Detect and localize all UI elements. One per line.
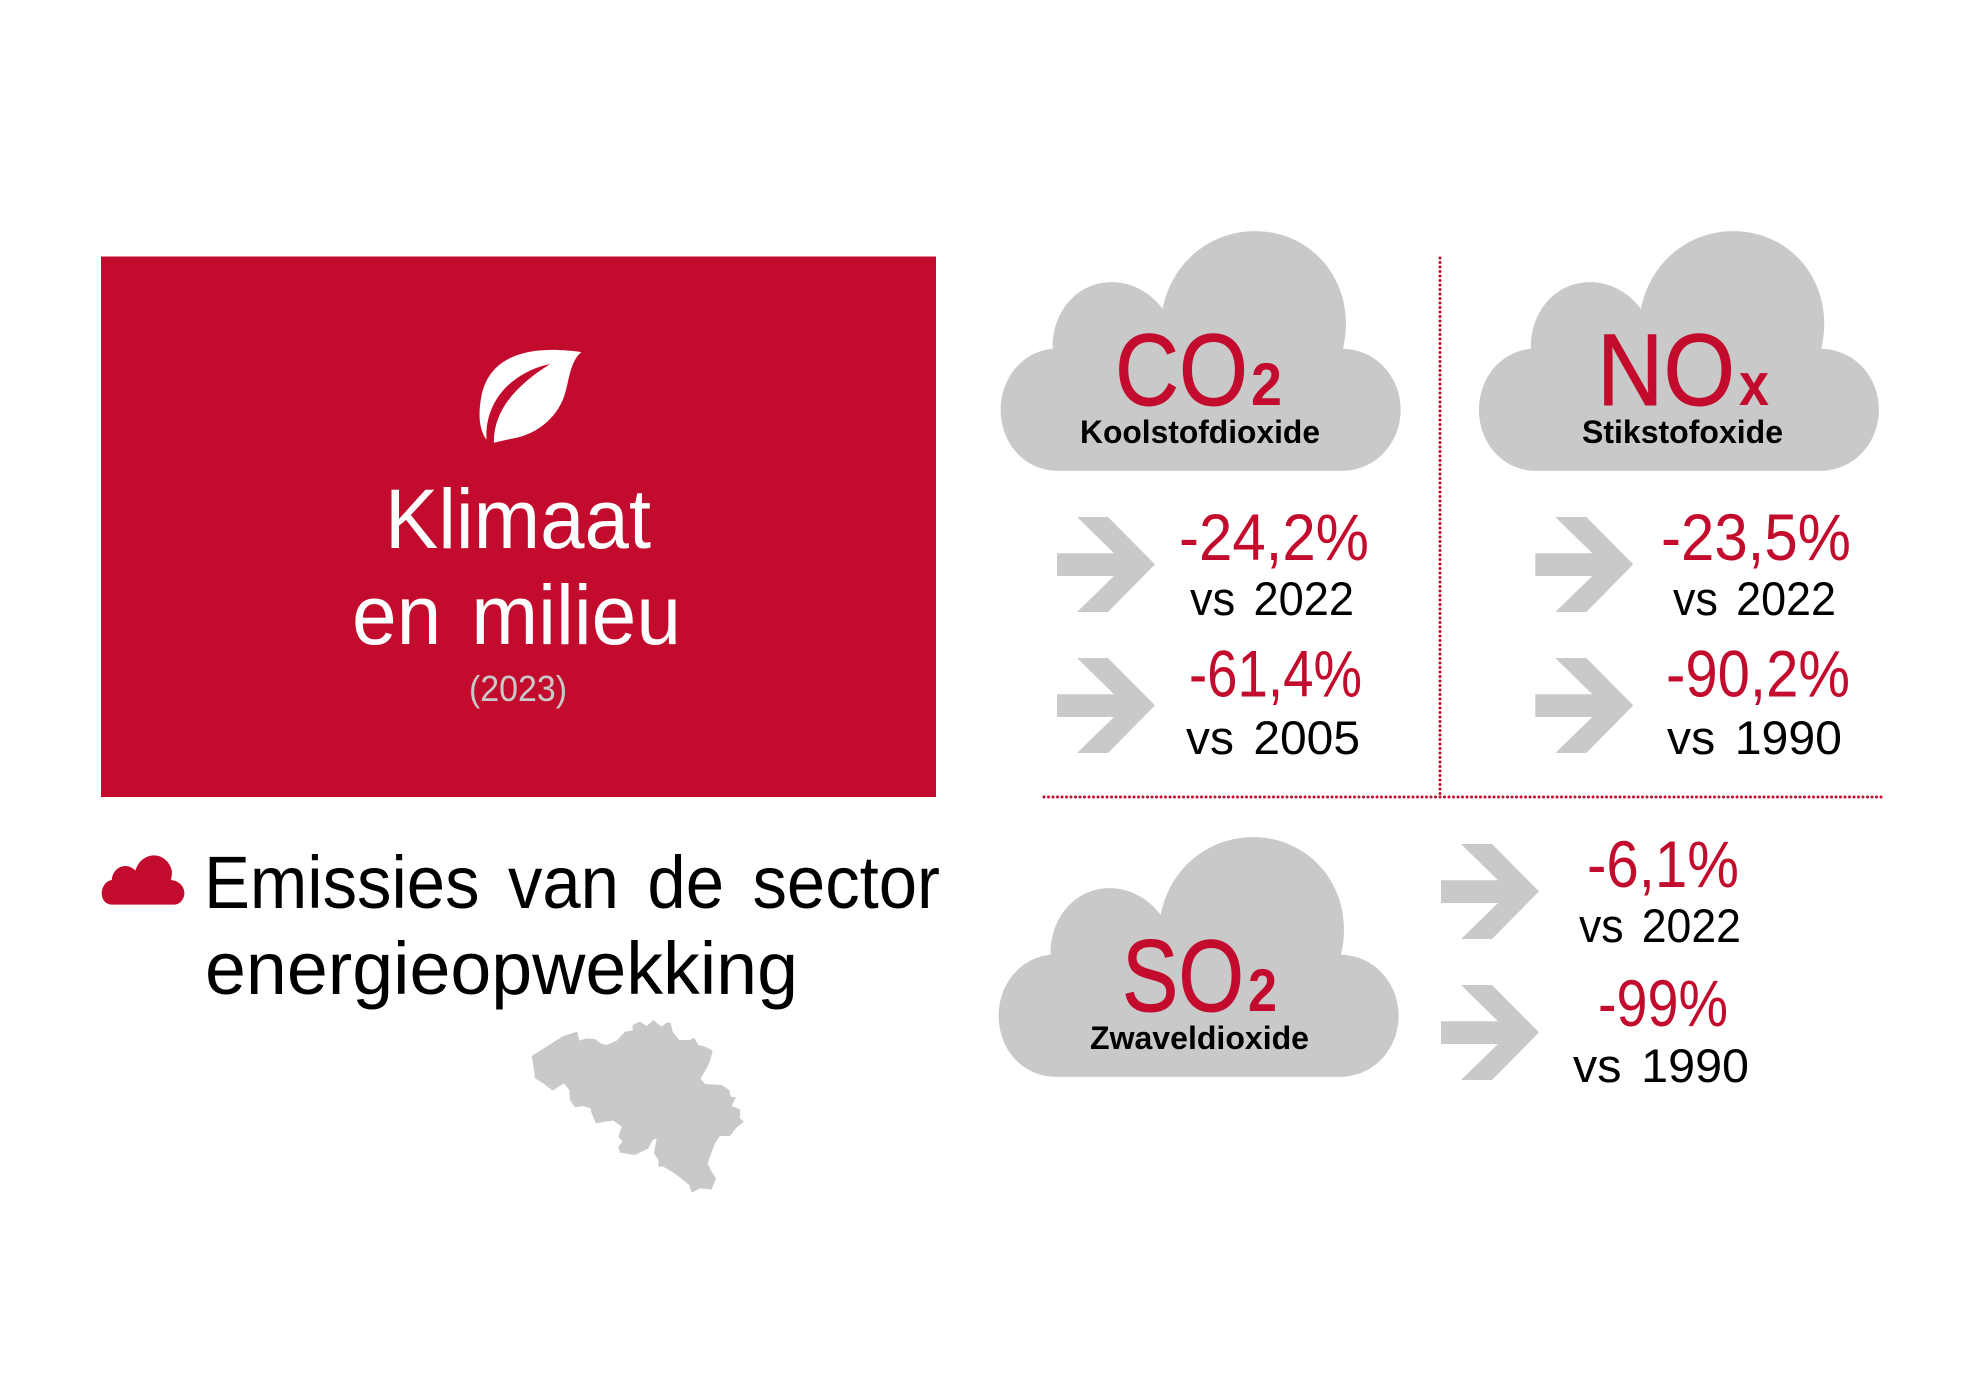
label: vs 1990: vs 1990	[1667, 711, 1842, 764]
formula: CO2: 2	[1251, 351, 1282, 418]
name: Zwaveldioxide: Zwaveldioxide	[1090, 1020, 1309, 1056]
arrow	[1441, 985, 1539, 1080]
arrow	[1535, 658, 1633, 753]
cloud: SO2	[999, 837, 1399, 1077]
value: -23,5%: -23,5%	[1661, 500, 1851, 574]
divider: vertical dotted	[1438, 258, 1442, 796]
panel: CO2	[1001, 231, 1401, 764]
value: -90,2%: -90,2%	[1666, 636, 1850, 710]
label: vs 2022: vs 2022	[1579, 899, 1741, 952]
cloud: NOx	[1479, 231, 1879, 471]
heading: Klimaat: Klimaat	[385, 472, 651, 566]
panel: title	[101, 256, 936, 797]
value: -99%: -99%	[1598, 966, 1728, 1040]
formula: SO2: 2	[1248, 957, 1277, 1024]
formula: NOx: NO	[1597, 313, 1735, 427]
label: vs 2005: vs 2005	[1186, 711, 1360, 764]
arrow	[1535, 517, 1633, 612]
value: -24,2%: -24,2%	[1179, 500, 1369, 574]
formula: SO2: SO	[1122, 919, 1244, 1033]
icon: leaf	[480, 350, 581, 443]
value: -6,1%: -6,1%	[1587, 827, 1739, 901]
arrow	[1057, 658, 1155, 753]
formula: CO2: CO	[1115, 313, 1248, 427]
cloud: CO2	[1001, 231, 1401, 471]
panel: NOx	[1479, 231, 1879, 764]
icon: red cloud	[102, 855, 184, 905]
panel: SO2	[999, 827, 1749, 1092]
label: vs 1990: vs 1990	[1573, 1039, 1749, 1092]
subtitle	[204, 841, 940, 1010]
value: -61,4%: -61,4%	[1189, 636, 1362, 710]
name: Stikstofoxide: Stikstofoxide	[1582, 414, 1783, 450]
label: vs 2022: vs 2022	[1190, 572, 1354, 625]
label: vs 2022: vs 2022	[1673, 572, 1836, 625]
subtitle: energieopwekking	[205, 927, 798, 1010]
subtitle: Emissies van de sector	[204, 841, 940, 924]
heading: en milieu: en milieu	[352, 568, 681, 662]
divider: horizontal dotted	[1044, 796, 1882, 798]
name: Koolstofdioxide: Koolstofdioxide	[1080, 414, 1320, 450]
arrow	[1057, 517, 1155, 612]
map: Belgium	[532, 1020, 744, 1193]
formula: NOx: x	[1739, 351, 1769, 418]
year: (2023)	[469, 668, 567, 709]
arrow	[1441, 844, 1539, 939]
